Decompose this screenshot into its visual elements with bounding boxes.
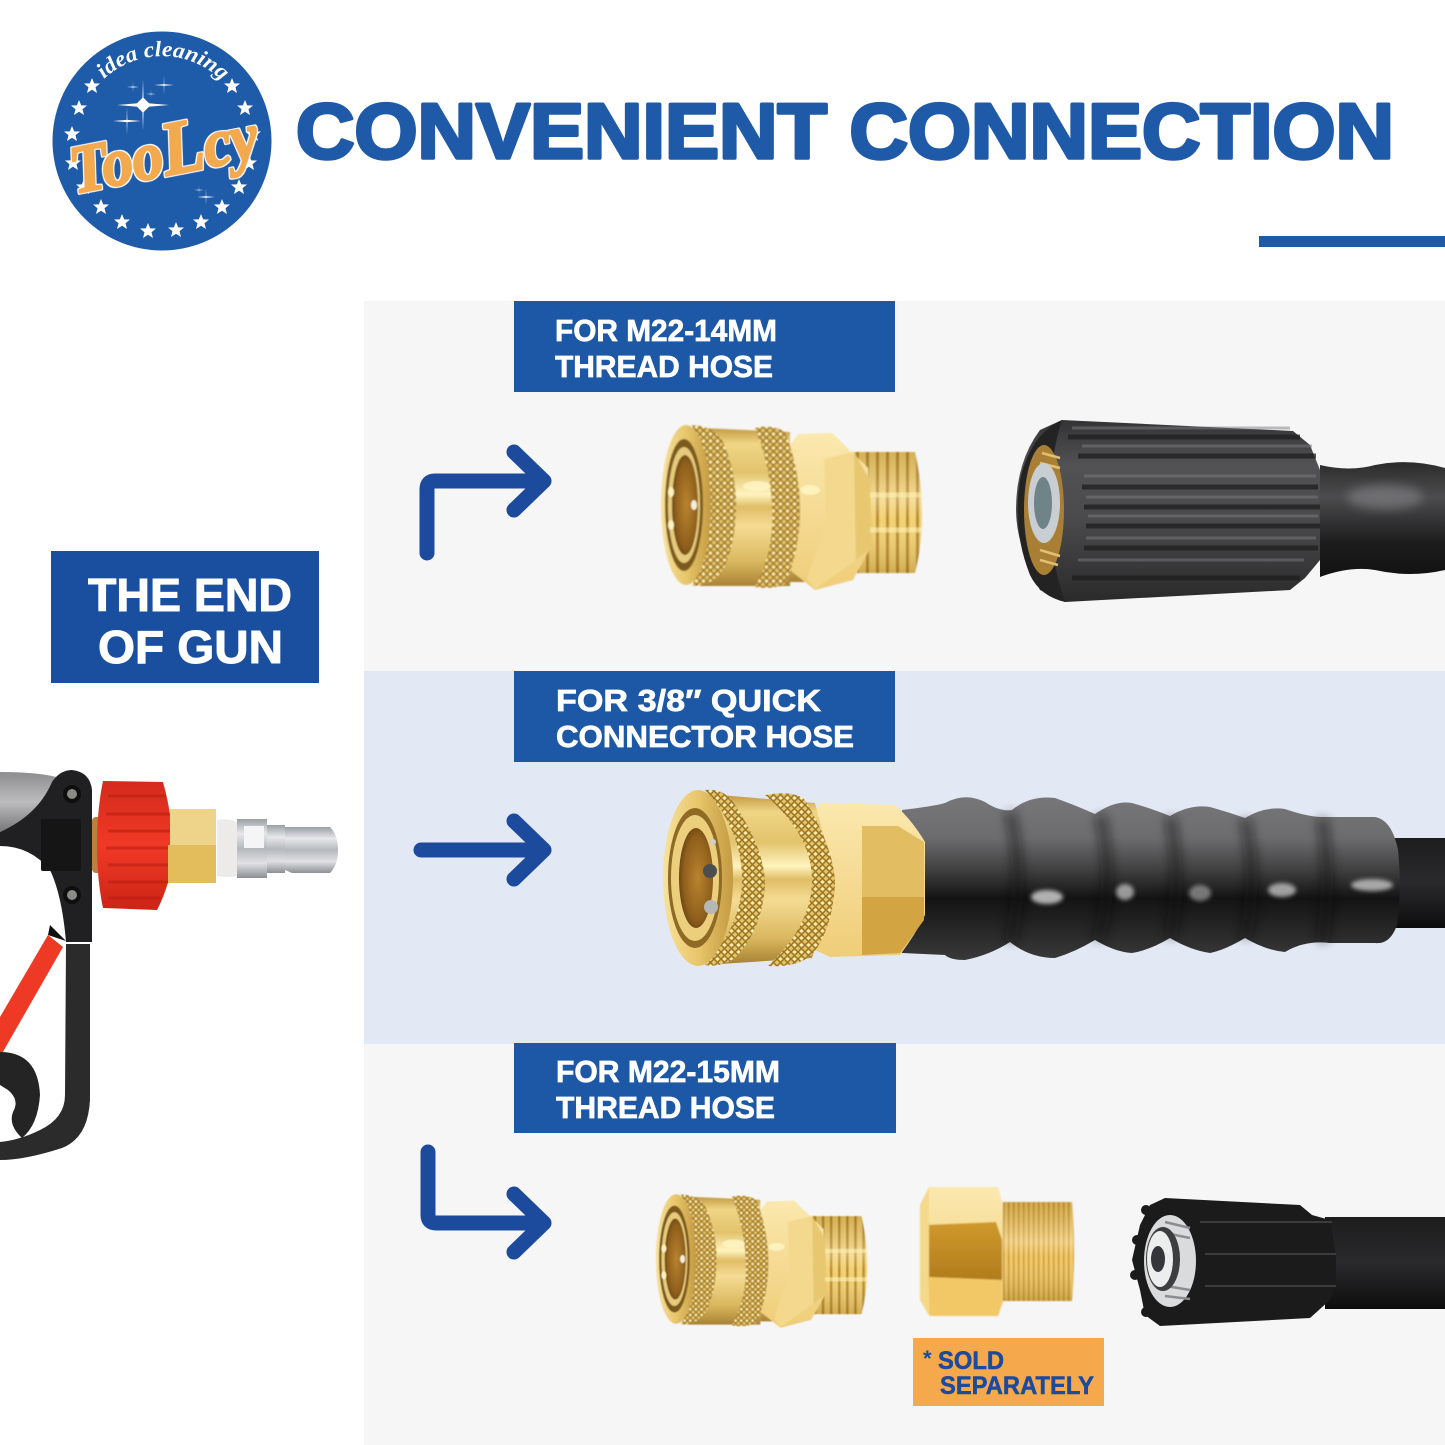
panel: M22-14mm row [364, 301, 1445, 671]
callout: sold separately [913, 1338, 1104, 1406]
label: 3/8 quick connector hose: CONNECTOR HOSE [556, 719, 854, 754]
title accent bar [1259, 236, 1445, 247]
panel: quick connector row [364, 671, 1445, 1044]
label: M22-14mm thread hose: FOR M22-14MM [555, 313, 777, 348]
brass coupler: M22-15mm [656, 1194, 867, 1328]
label: M22-14mm thread hose [514, 301, 895, 392]
callout: sold separately: SEPARATELY [940, 1372, 1094, 1400]
arrow: across to quick connector [421, 821, 544, 879]
hose with strain relief and brass coupler: quick connector [663, 790, 1445, 966]
logo: TooLcy badge: idea cleaning [96, 40, 228, 80]
label: the end of gun [51, 551, 319, 683]
label: 3/8 quick connector hose: FOR 3/8′′ QUICK [556, 683, 822, 718]
arrow: up to M22-14mm [427, 452, 544, 553]
label: the end of gun: THE END [88, 569, 292, 621]
label: M22-15mm thread hose: THREAD HOSE [556, 1090, 775, 1125]
brass coupler: M22-14mm [661, 425, 922, 590]
callout: sold separately: SOLD [938, 1347, 1004, 1375]
label: M22-15mm thread hose: FOR M22-15MM [556, 1054, 780, 1089]
label: M22-14mm thread hose: THREAD HOSE [555, 349, 773, 384]
callout: sold separately: * [923, 1346, 932, 1371]
black hose nut: M22-15mm [1130, 1198, 1445, 1326]
black hose nut: M22-14mm [1016, 420, 1445, 602]
logo: TooLcy badge: TooLcy [62, 91, 265, 210]
title: CONVENIENT CONNECTION [296, 87, 1394, 175]
label: 3/8 quick connector hose [514, 671, 895, 762]
icon: pressure washer gun [0, 770, 338, 1160]
arrow: down to M22-15mm [428, 1152, 544, 1252]
panel: M22-15mm row [364, 1044, 1445, 1445]
logo: TooLcy badge [52, 32, 272, 250]
brass adapter: sold separately [920, 1187, 1074, 1316]
label: M22-15mm thread hose [514, 1043, 896, 1133]
label: the end of gun: OF GUN [98, 621, 283, 673]
